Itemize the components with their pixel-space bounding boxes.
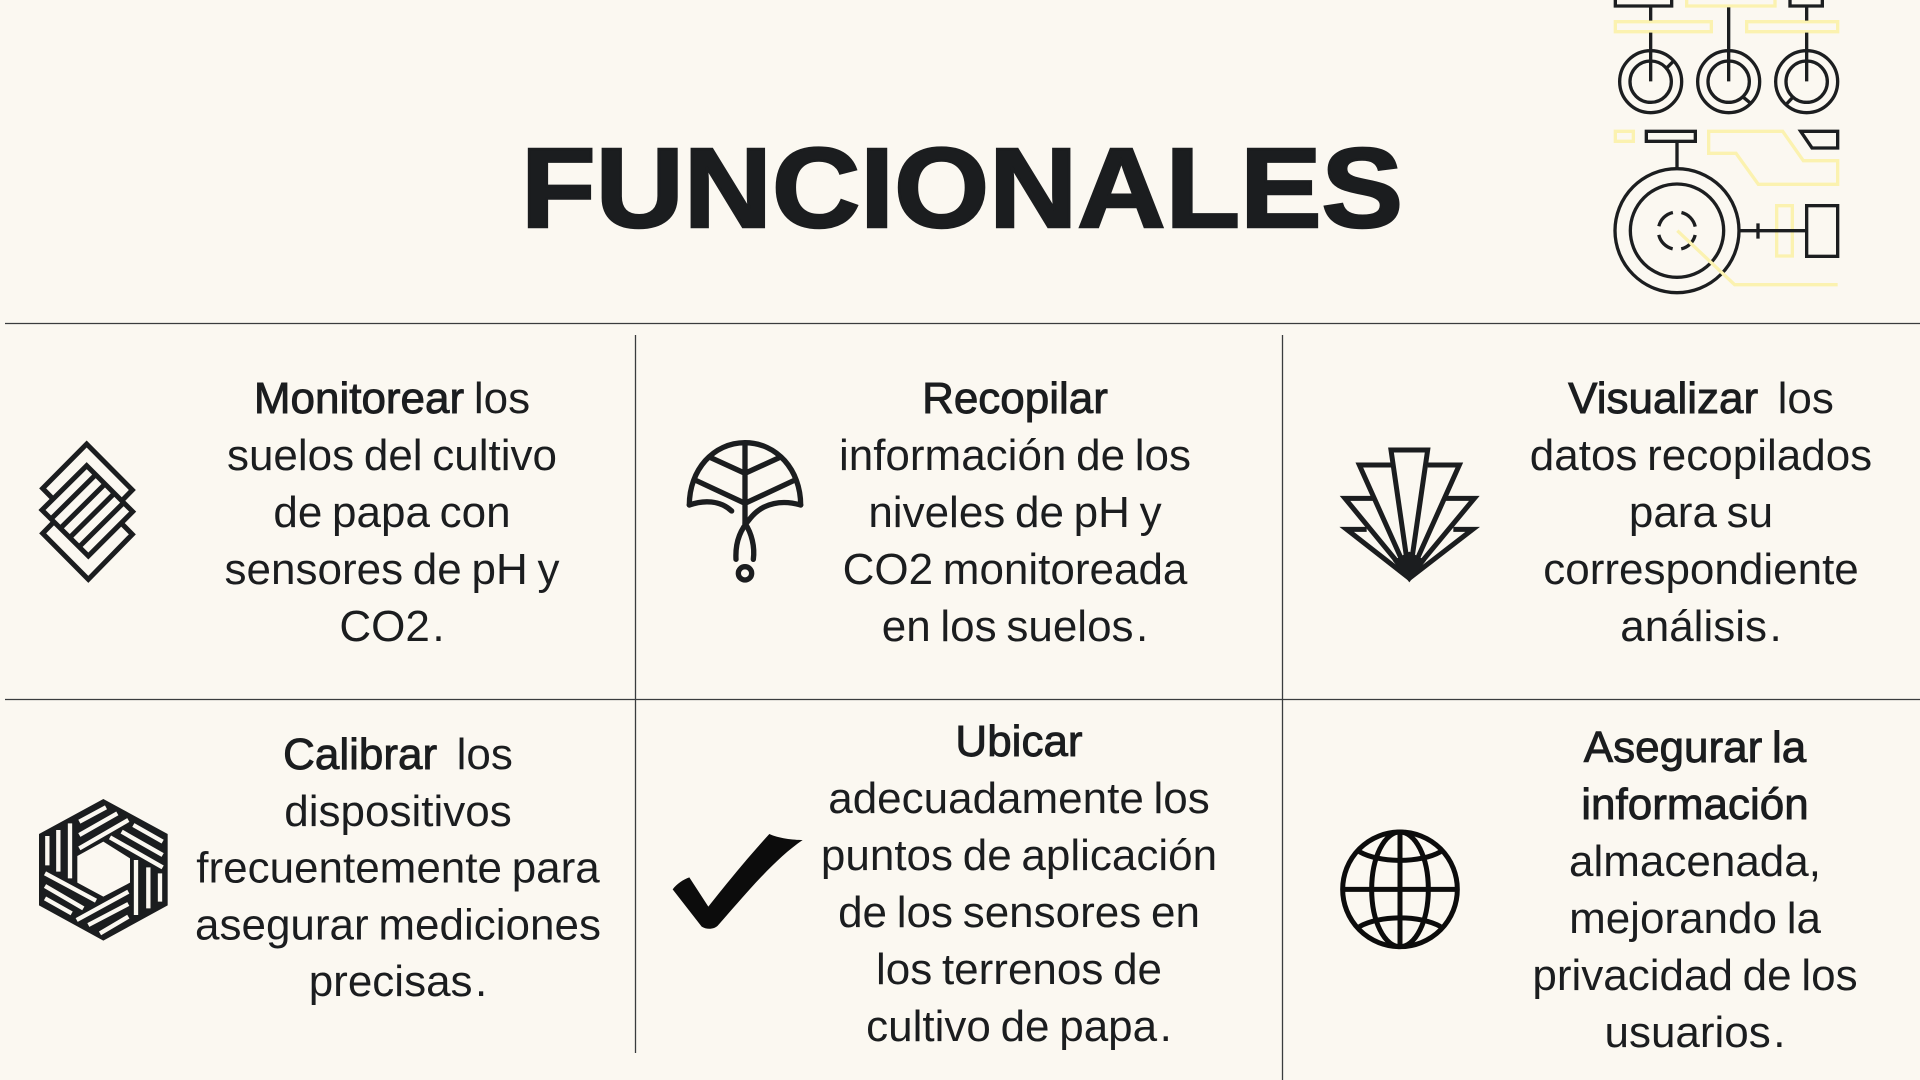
text: visualizar: para su bbox=[1629, 488, 1773, 537]
panel: monitorear bbox=[42, 374, 559, 651]
text: visualizar: correspondiente bbox=[1543, 545, 1859, 594]
text: asegurar: privacidad de los bbox=[1532, 951, 1858, 1000]
text: asegurar: almacenada, bbox=[1569, 837, 1821, 886]
text: monitorear: suelos del cultivo bbox=[227, 431, 557, 480]
text: asegurar: usuarios. bbox=[1604, 1008, 1786, 1057]
text: visualizar: análisis. bbox=[1620, 602, 1782, 651]
text: calibrar: frecuentemente para bbox=[196, 844, 600, 893]
text: recopilar: Recopilar bbox=[922, 374, 1108, 423]
text: asegurar: mejorando la bbox=[1569, 894, 1821, 943]
text: ubicar: Ubicar bbox=[955, 717, 1083, 766]
text: ubicar: adecuadamente los bbox=[828, 774, 1210, 823]
panel: recopilar bbox=[689, 374, 1191, 651]
icon: globe bbox=[1343, 832, 1457, 947]
text: recopilar: niveles de pH y bbox=[868, 488, 1162, 537]
text: calibrar: dispositivos bbox=[284, 787, 512, 836]
icon: check mark bbox=[673, 834, 803, 929]
text: asegurar: información bbox=[1581, 780, 1809, 829]
panel: calibrar bbox=[39, 730, 601, 1006]
text: recopilar: CO2 monitoreada bbox=[843, 545, 1188, 594]
text: monitorear: sensores de pH y bbox=[225, 545, 559, 594]
panel: ubicar bbox=[673, 717, 1217, 1051]
text: ubicar: los terrenos de bbox=[876, 945, 1162, 994]
text: visualizar: Visualizar los bbox=[1568, 374, 1834, 423]
panel: asegurar bbox=[1343, 723, 1858, 1057]
text: calibrar: precisas. bbox=[309, 957, 487, 1006]
text: visualizar: datos recopilados bbox=[1530, 431, 1872, 480]
text: calibrar: Calibrar los bbox=[283, 730, 513, 779]
text: monitorear: Monitorear los bbox=[254, 374, 530, 423]
text: monitorear: de papa con bbox=[273, 488, 511, 537]
text: ubicar: puntos de aplicación bbox=[821, 831, 1217, 880]
icon: art deco fan bbox=[1345, 450, 1474, 582]
text: ubicar: de los sensores en bbox=[838, 888, 1200, 937]
text: monitorear: CO2. bbox=[339, 602, 445, 651]
text: recopilar: en los suelos. bbox=[882, 602, 1148, 651]
icon: circuit diagram bbox=[1615, 0, 1838, 293]
text: calibrar: asegurar mediciones bbox=[195, 900, 601, 949]
icon: stacked diamonds bbox=[42, 444, 133, 579]
text: ubicar: cultivo de papa. bbox=[866, 1002, 1172, 1051]
icon: leaf bbox=[689, 443, 801, 580]
text: recopilar: información de los bbox=[839, 431, 1191, 480]
icon: woven hexagon bbox=[39, 799, 168, 941]
text: asegurar: Asegurar la bbox=[1584, 723, 1807, 772]
panel: visualizar bbox=[1345, 374, 1872, 651]
title: FUNCIONALES bbox=[521, 125, 1403, 251]
